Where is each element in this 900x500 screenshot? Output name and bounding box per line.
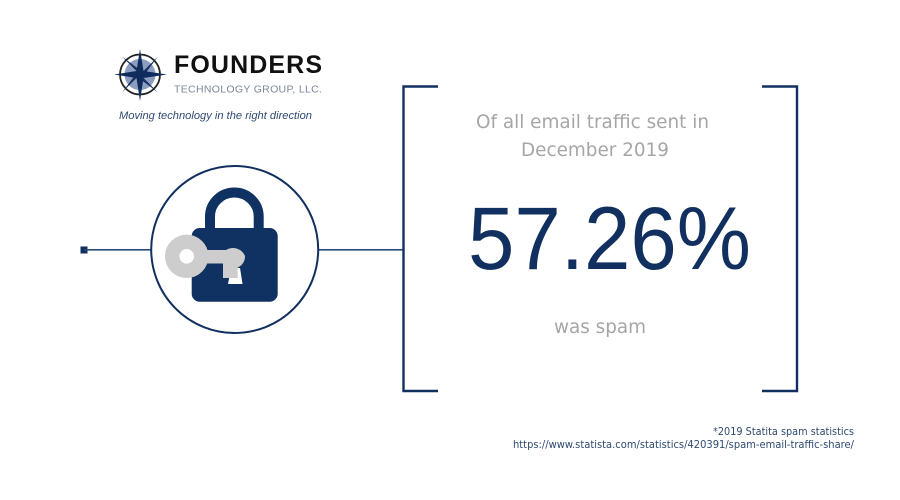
source note: https://www.statista.com/statistics/420391/spam-email-traffic-share/ (513, 439, 854, 451)
text block: intro: Of all email traffic sent in (476, 111, 709, 133)
text block: was spam: was spam (554, 316, 646, 338)
text block: intro (476, 111, 709, 161)
padlock (192, 192, 278, 302)
logo tagline: Moving technology in the right direction (119, 110, 312, 122)
source note (513, 426, 854, 451)
keyhole (228, 268, 242, 284)
logo subtitle: TECHNOLOGY GROUP, LLC. (174, 84, 322, 96)
icon: lock and key in circle (151, 166, 318, 333)
connector line with square end (80, 246, 151, 254)
right bracket (762, 86, 797, 391)
text block: intro: December 2019 (521, 139, 669, 161)
big statistic: 57.26% (468, 188, 751, 288)
logo wordmark: FOUNDERS (174, 51, 322, 79)
icon: compass rose (114, 49, 167, 101)
left bracket (404, 86, 438, 391)
logo: Founders Technology Group (114, 49, 322, 122)
connector line to bracket (318, 249, 403, 251)
source note: *2019 Statita spam statistics (713, 426, 854, 438)
key (172, 242, 245, 278)
